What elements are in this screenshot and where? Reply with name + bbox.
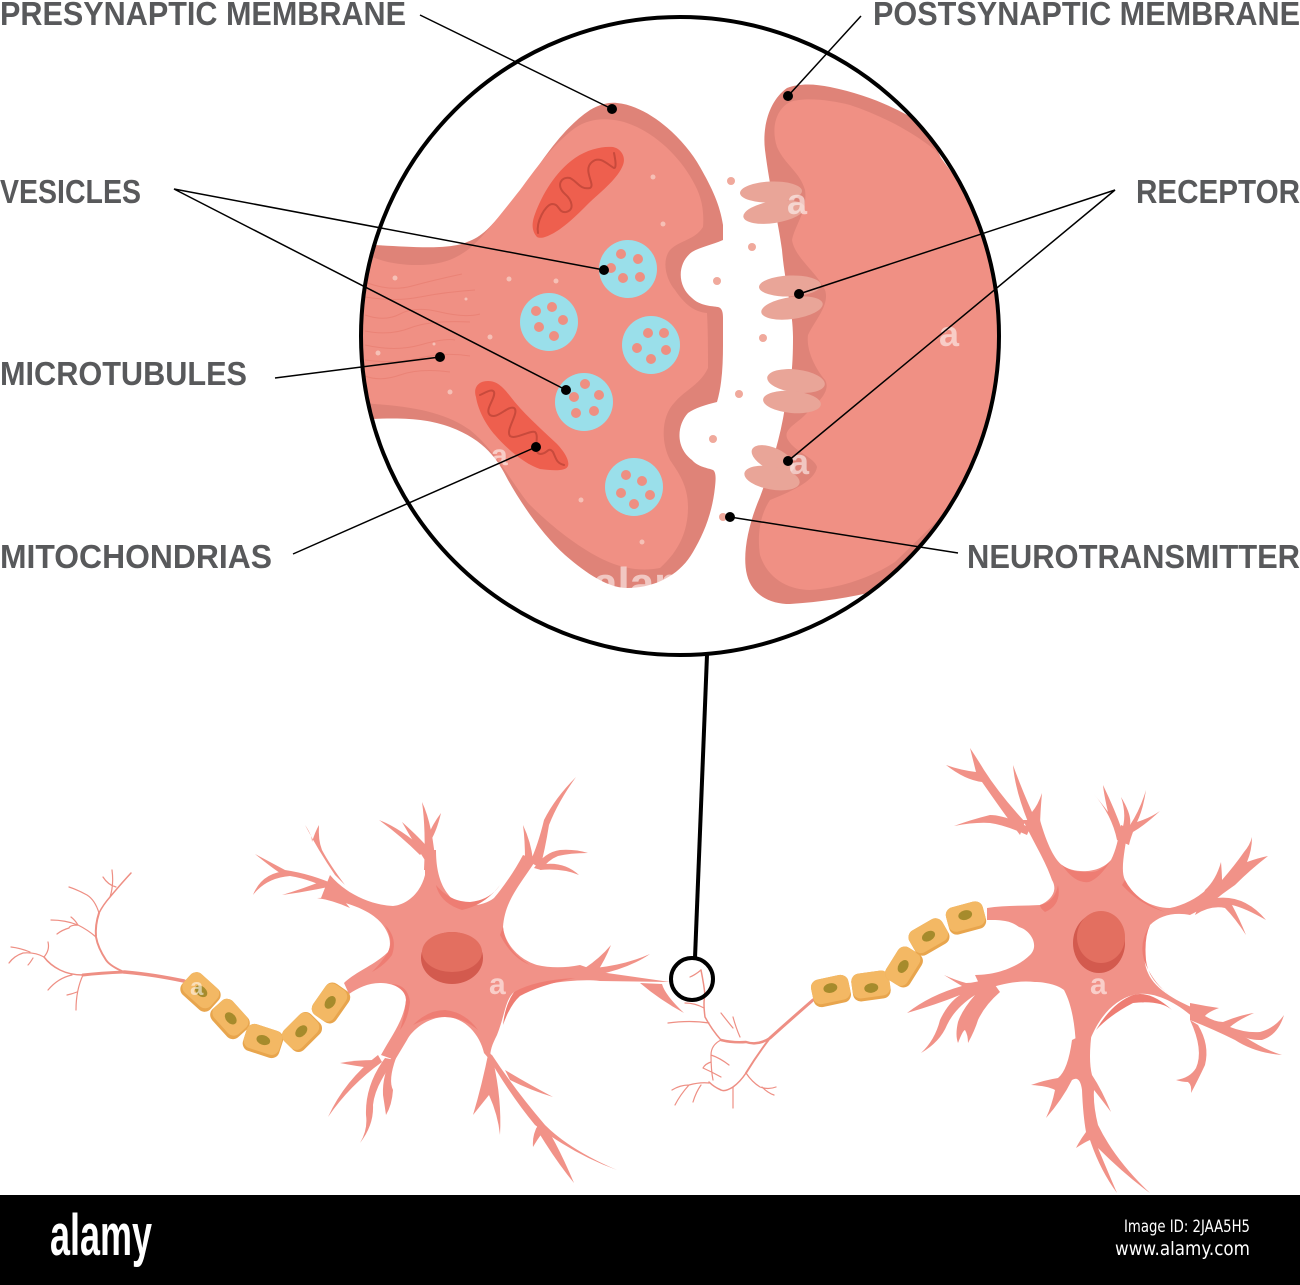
watermark fragments: a: [939, 313, 960, 354]
website: www.alamy.com: [1115, 1238, 1250, 1260]
neuron: left: [9, 777, 684, 1183]
vesicle 2: [520, 293, 578, 351]
postsynaptic terminal: [745, 84, 1010, 604]
right neuron watermark: a: [1090, 968, 1107, 1001]
left neuron watermarks: a: [190, 974, 204, 1001]
vesicle 4: [555, 373, 613, 431]
left nucleus: [421, 932, 483, 984]
vesicle 5: [605, 458, 663, 516]
watermark fragments: alam: [593, 559, 693, 608]
footer logo: alamy: [50, 1203, 152, 1268]
right axon terminal tree: [668, 970, 813, 1108]
right soma and trunks: [975, 820, 1226, 1090]
vesicle 1: [599, 240, 657, 298]
mitochondrion upper: [533, 147, 624, 238]
left soma and trunks: [321, 850, 670, 1060]
presynaptic terminal: [355, 103, 723, 588]
magnifier small target ring: [671, 958, 713, 1000]
label: mitochondrias: [0, 442, 541, 575]
left axon terminal tree: [9, 870, 184, 1010]
right nucleus: [1073, 911, 1125, 973]
right soma shading: [1040, 860, 1172, 1030]
left neuron watermarks: a: [489, 968, 506, 1001]
receptors: [740, 180, 826, 494]
left myelin cells: [177, 969, 353, 1060]
image id: Image ID: 2JAA5H5: [1124, 1217, 1250, 1237]
neurotransmitter dots: [709, 177, 767, 521]
left soma shading: [372, 885, 575, 1030]
right dendrites: [907, 748, 1284, 1193]
watermark fragments: a: [789, 441, 810, 482]
label: microtubules: [0, 352, 445, 392]
footer bar: [0, 1195, 1300, 1285]
neuron: right: [668, 748, 1284, 1193]
right myelin cells: [810, 900, 988, 1009]
pale cytoplasm dots: [376, 174, 666, 544]
microtubules: [365, 274, 480, 379]
label: neurotransmitter: [725, 512, 1300, 575]
vesicle 3: [622, 316, 680, 374]
label: microtubules: MICROTUBULES: [0, 355, 247, 392]
mitochondrion lower: [475, 381, 568, 470]
label: vesicles: [0, 173, 609, 395]
label: mitochondrias: MITOCHONDRIAS: [0, 538, 272, 575]
label: vesicles: VESICLES: [0, 173, 141, 210]
magnifier stem: [695, 655, 707, 958]
label: receptor: [783, 173, 1300, 466]
panel: magnified synapse: [355, 84, 1010, 608]
watermark fragments: a: [491, 439, 508, 472]
left dendrites: [253, 777, 684, 1183]
magnifier ring: [361, 17, 999, 655]
label: presynaptic membrane: [0, 0, 617, 114]
watermark fragments: [491, 181, 960, 608]
left neuron watermarks: [190, 968, 506, 1001]
watermark fragments: a: [787, 181, 808, 222]
label: postsynaptic membrane: [783, 0, 1300, 101]
